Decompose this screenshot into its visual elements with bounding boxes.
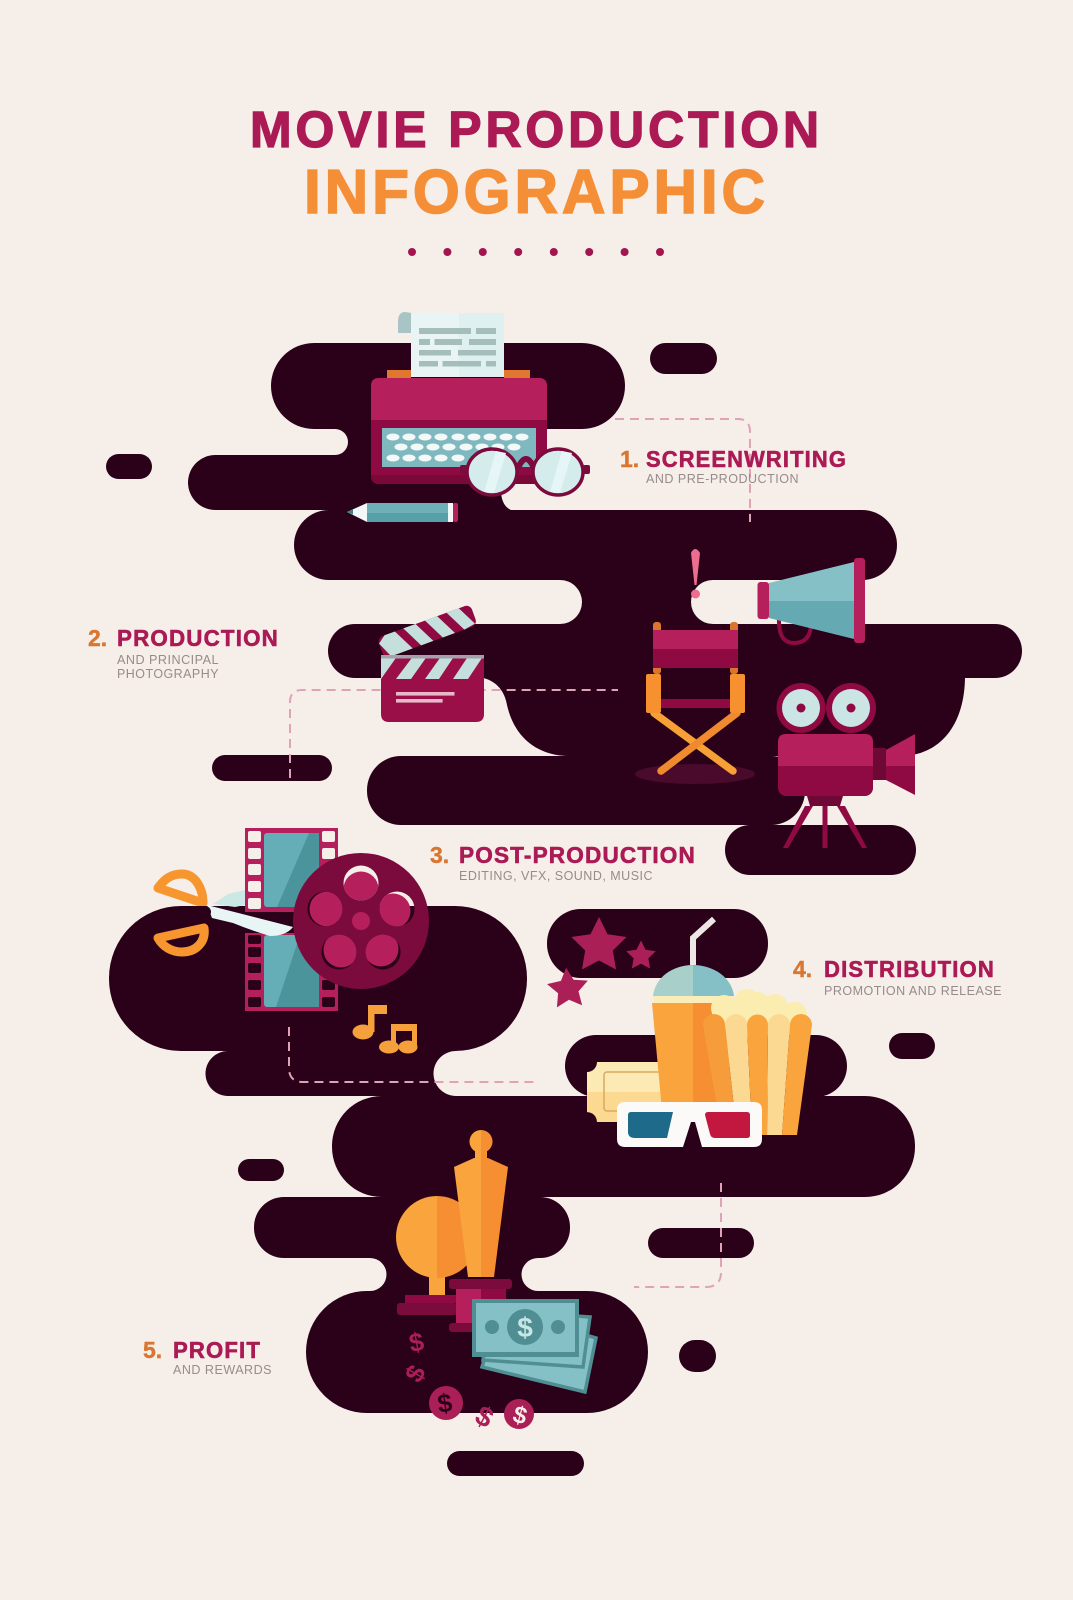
label: step 3 post-production: 3. <box>430 842 449 868</box>
icon: exclamation mark <box>691 549 700 598</box>
label: step 3 post-production: EDITING, VFX, SOUND, MUSIC <box>459 868 653 883</box>
title line two: INFOGRAPHIC <box>304 158 769 227</box>
icon: popcorn box <box>703 989 812 1135</box>
label: step 2 production <box>88 625 279 681</box>
icon: falling dollar signs <box>399 1326 534 1434</box>
icon: typewriter <box>371 312 547 484</box>
label: step 3 post-production <box>430 842 696 883</box>
label: step 5 profit: AND REWARDS <box>173 1362 272 1377</box>
label: step 4 distribution: 4. <box>793 956 812 982</box>
tripod <box>783 796 867 848</box>
icon: director chair <box>635 622 755 784</box>
icon: soda cup <box>652 919 735 1110</box>
label: step 2 production: PRODUCTION <box>117 625 279 651</box>
label: step 1 screenwriting <box>620 446 847 486</box>
title <box>250 101 823 227</box>
label: step 1 screenwriting: SCREENWRITING <box>646 446 847 472</box>
label: step 5 profit: PROFIT <box>173 1337 261 1363</box>
paper sheet <box>398 312 504 377</box>
popcorn kernels <box>711 989 807 1028</box>
label: step 4 distribution: DISTRIBUTION <box>824 956 995 982</box>
dark flowing blob background <box>106 343 1022 1476</box>
label: step 5 profit <box>143 1337 272 1377</box>
icon: falling dollar signs: $ <box>510 1401 531 1431</box>
title dots <box>408 248 664 256</box>
icon: megaphone <box>758 558 865 643</box>
icon: pencil <box>347 503 458 522</box>
icon: scissors <box>158 874 293 952</box>
icon: 3D glasses <box>617 1102 762 1147</box>
icon: music notes <box>352 1005 418 1054</box>
keyboard <box>382 428 536 467</box>
label: step 2 production: AND PRINCIPAL <box>117 652 219 667</box>
title line one: MOVIE PRODUCTION <box>250 101 823 158</box>
label: step 4 distribution <box>793 956 1002 998</box>
label: step 1 screenwriting: AND PRE-PRODUCTION <box>646 471 799 486</box>
icon: oscar statue <box>449 1130 512 1332</box>
film reels <box>776 683 876 733</box>
icon: film camera <box>776 683 915 848</box>
label: step 2 production: PHOTOGRAPHY <box>117 666 219 681</box>
label: step 2 production: 2. <box>88 625 107 651</box>
icon: falling dollar signs: $ <box>435 1387 455 1419</box>
label: step 1 screenwriting: 1. <box>620 446 639 472</box>
icon: reading glasses <box>460 449 590 495</box>
icon: falling dollar signs: $ <box>407 1326 427 1358</box>
dashed connector lines <box>289 419 750 1287</box>
clapper arm <box>377 604 478 659</box>
label: step 3 post-production: POST-PRODUCTION <box>459 842 696 868</box>
icon: falling dollar signs: $ <box>399 1359 432 1387</box>
icon: film reel <box>293 853 429 989</box>
icon: film strip <box>245 828 338 1011</box>
icon: falling dollar signs: $ <box>470 1399 499 1434</box>
label: step 4 distribution: PROMOTION AND RELEASE <box>824 983 1002 998</box>
icon: stars <box>546 917 656 1008</box>
icon: clapperboard <box>377 604 484 722</box>
icon: stack of money: $ <box>517 1312 533 1343</box>
label: step 5 profit: 5. <box>143 1337 162 1363</box>
icon: stack of money <box>472 1299 596 1392</box>
icon: golden globe trophy <box>396 1196 478 1315</box>
icon: movie ticket <box>587 1062 674 1122</box>
